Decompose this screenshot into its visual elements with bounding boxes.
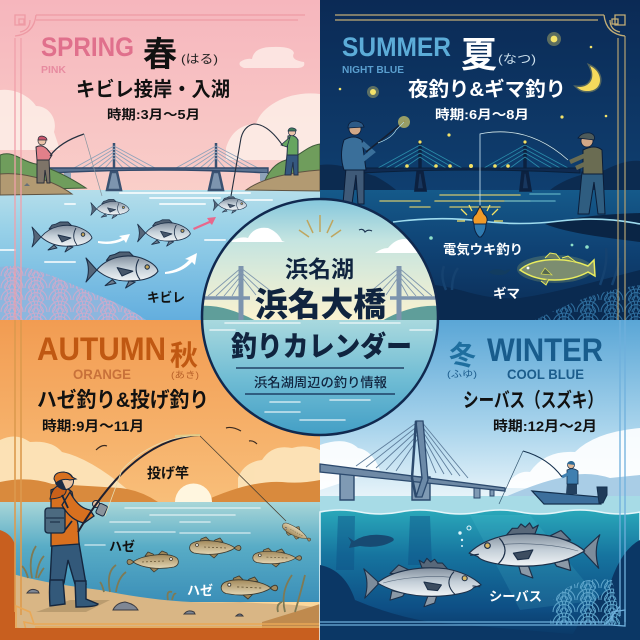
summer glowing fish [517, 253, 595, 285]
spring clouds [0, 47, 320, 160]
winter seigaiha pattern [550, 579, 622, 625]
winter heading: 冬 [449, 341, 476, 371]
winter boat and angler [499, 451, 607, 504]
winter bridge [320, 421, 505, 500]
spring left angler [36, 134, 102, 196]
autumn heading: (あき) [171, 370, 199, 380]
autumn lower right bank [262, 604, 320, 628]
spring heading: (はる) [181, 52, 218, 66]
summer seaweed [442, 248, 620, 290]
autumn heading: 秋 [170, 340, 198, 371]
winter bridge underwater shadow [336, 516, 432, 570]
spring heading [41, 32, 230, 122]
winter clouds [320, 428, 640, 490]
summer heading: NIGHT BLUE [342, 65, 404, 76]
summer heading [342, 32, 566, 122]
summer glowing dots [429, 236, 589, 249]
winter heading [447, 332, 603, 434]
autumn heading: ORANGE [73, 366, 131, 382]
autumn clouds [0, 436, 320, 490]
autumn heading: AUTUMN [37, 331, 166, 367]
autumn hills [0, 479, 320, 502]
winter fish label: シーバス [489, 589, 542, 604]
autumn rod label: 投げ竿 [147, 465, 189, 481]
badge background scene [200, 196, 440, 440]
spring water [0, 190, 320, 320]
summer heading: 夜釣り&ギマ釣り [408, 78, 566, 101]
spring heading: キビレ接岸・入湖 [76, 78, 230, 101]
autumn heading: ハゼ釣り&投げ釣り [37, 388, 209, 412]
summer water [320, 190, 640, 320]
autumn water [0, 502, 320, 602]
small background fish [488, 269, 510, 275]
winter bubbles [458, 526, 471, 547]
winter surface water [320, 496, 640, 516]
autumn reeds [22, 546, 305, 612]
summer crescent moon [577, 66, 600, 91]
autumn fishing rod [78, 435, 286, 532]
summer seigaiha pattern [535, 285, 640, 320]
spring fish [32, 197, 247, 288]
winter frame [320, 320, 625, 626]
autumn angler [36, 472, 110, 612]
summer heading: (なつ) [498, 52, 536, 66]
winter light rays [470, 515, 600, 610]
summer distant hills [320, 161, 640, 195]
badge title main: 浜名大橋 [255, 286, 386, 323]
panel: autumn [0, 320, 320, 640]
summer heading: 時期:6月〜8月 [435, 107, 529, 122]
autumn sun [175, 484, 212, 502]
panel: spring [0, 0, 320, 320]
panel: winter [320, 320, 640, 640]
badge subtitle: 浜名湖周辺の釣り情報 [254, 375, 387, 390]
winter seabed [320, 540, 640, 640]
summer frame [335, 15, 625, 320]
winter heading: 時期:12月〜2月 [493, 418, 597, 434]
spring seigaiha pattern [0, 266, 146, 320]
spring right bank [246, 144, 320, 191]
spring heading: 時期:3月〜5月 [107, 107, 200, 122]
spring heading: 春 [143, 36, 177, 74]
autumn birds [96, 427, 257, 450]
autumn gobies [127, 519, 314, 599]
summer right angler [480, 132, 605, 214]
autumn bottom band [0, 628, 320, 640]
winter seabass [364, 523, 600, 607]
summer stars and fireflies [339, 32, 607, 137]
spring left bank [0, 154, 86, 195]
summer heading: SUMMER [342, 32, 451, 62]
summer float label: 電気ウキ釣り [443, 242, 523, 257]
autumn goby label: ハゼ [109, 539, 135, 554]
autumn heading: 時期:9月〜11月 [42, 418, 144, 434]
autumn sand [0, 570, 320, 640]
spring bridge [50, 143, 268, 190]
summer bridge lights [405, 140, 527, 168]
center title badge [200, 196, 440, 440]
winter silhouette fish [348, 535, 394, 548]
summer electric float [457, 205, 503, 237]
spring right angler [231, 124, 298, 196]
autumn water highlights [85, 508, 260, 545]
spring arrows [98, 217, 216, 274]
spring water highlights [0, 193, 272, 262]
summer left angler [342, 116, 410, 204]
autumn goby label white: ハゼ [187, 583, 213, 598]
autumn left bank [0, 530, 15, 640]
autumn heading [37, 331, 209, 434]
summer seabed and right bank [545, 213, 640, 242]
summer fish label: ギマ [493, 286, 520, 301]
summer wave line [393, 219, 640, 224]
panel: summer [320, 0, 640, 320]
autumn rocks [27, 589, 243, 616]
spring frame [15, 15, 305, 320]
summer heading: 夏 [461, 34, 497, 75]
autumn frame [15, 320, 320, 630]
sun rays [299, 215, 341, 237]
winter heading: シーバス（スズキ） [463, 388, 603, 412]
winter mountains [505, 474, 640, 497]
summer bridge [362, 141, 580, 190]
winter underwater [320, 510, 640, 640]
spring heading: SPRING [41, 32, 134, 62]
badge outline [202, 199, 438, 435]
spring fish label: キビレ [147, 290, 185, 305]
badge divider lines [236, 368, 404, 394]
summer water reflections [380, 194, 560, 207]
badge title small: 浜名湖 [285, 256, 354, 282]
spring heading: PINK [41, 65, 67, 76]
winter heading: WINTER [487, 332, 603, 368]
bird [359, 229, 372, 232]
winter heading: (ふゆ) [447, 369, 477, 379]
winter heading: COOL BLUE [507, 366, 584, 382]
badge title calendar: 釣りカレンダー [231, 330, 412, 362]
